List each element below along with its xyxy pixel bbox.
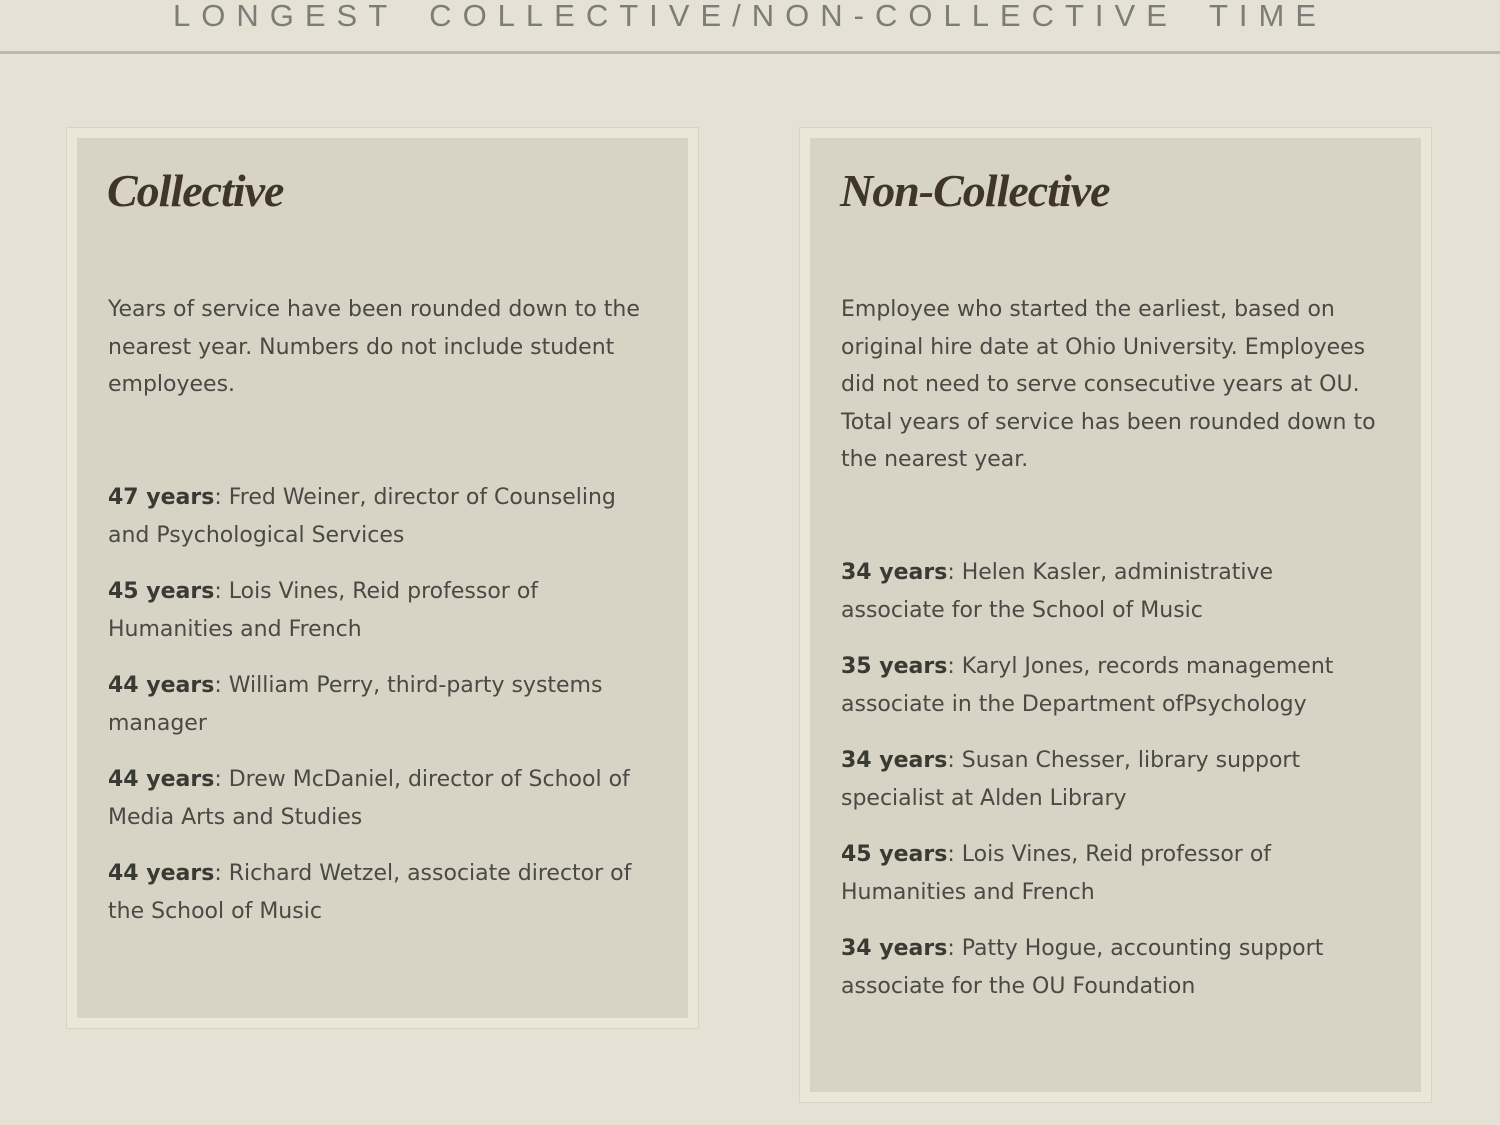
- list: collective entries: 47 years: Fred Weiner, director of Counseling and Psychological Services: [108, 485, 616, 548]
- panel: collective: [66, 127, 699, 1029]
- list: collective entries: 44 years: Drew McDaniel, director of School of Media Arts and Studies: [108, 767, 630, 830]
- list: non-collective entries: [841, 560, 1333, 998]
- list: collective entries: [108, 485, 632, 924]
- heading: collective: Collective: [107, 165, 283, 216]
- heading: non-collective: Non-Collective: [840, 165, 1110, 216]
- list: collective entries: 44 years: William Perry, third-party systems manager: [108, 673, 602, 736]
- list: non-collective entries: 34 years: Helen Kasler, administrative associate for the School of Music: [841, 560, 1273, 622]
- list: non-collective entries: 34 years: Patty Hogue, accounting support associate for the OU Foundation: [841, 936, 1323, 998]
- list: collective entries: 45 years: Lois Vines, Reid professor of Humanities and French: [108, 579, 538, 642]
- list: non-collective entries: 35 years: Karyl Jones, records management associate in the Department ofPsychology: [841, 654, 1333, 716]
- list: collective entries: 44 years: Richard Wetzel, associate director of the School of Music: [108, 861, 631, 924]
- text block: non-collective note: Employee who started the earliest, based on original hire date at Ohio University. Employees did not need to serve consecutive years at OU. Total years of service has been rounded down to the nearest year.: [841, 297, 1376, 472]
- text block: collective note: Years of service have been rounded down to the nearest year. Numbers do not include student employees.: [108, 297, 640, 397]
- list: non-collective entries: 45 years: Lois Vines, Reid professor of Humanities and French: [841, 842, 1271, 904]
- panel: non-collective: [799, 127, 1432, 1103]
- list: non-collective entries: 34 years: Susan Chesser, library support specialist at Alden Library: [841, 748, 1300, 810]
